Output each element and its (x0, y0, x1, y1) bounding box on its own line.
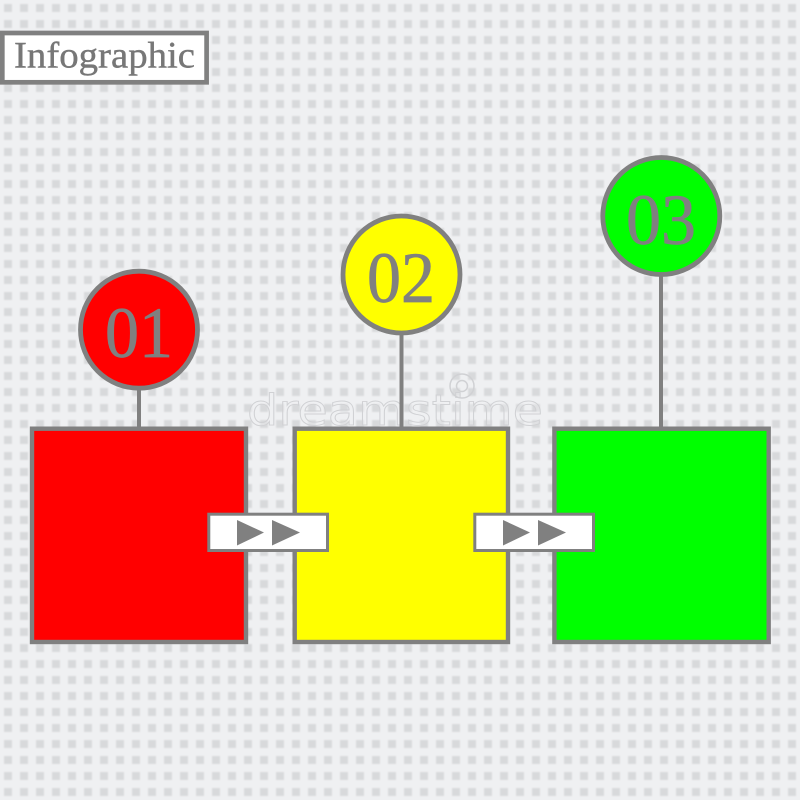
title: Infographic (14, 36, 195, 76)
badge: 03 (603, 158, 720, 274)
watermark: dreamstime (247, 386, 543, 436)
arrow: yellow to green (475, 514, 594, 550)
panel: green square (554, 429, 769, 642)
badge: 01: 01 (105, 293, 173, 373)
badge: 01 (80, 271, 198, 388)
badge: 02 (343, 216, 460, 333)
arrow: red to yellow (209, 514, 328, 550)
badge: 02: 02 (367, 238, 435, 318)
badge: 03: 03 (626, 180, 696, 260)
panel: yellow square (295, 429, 508, 642)
panel: red square (32, 429, 246, 642)
connector lines (139, 275, 661, 429)
